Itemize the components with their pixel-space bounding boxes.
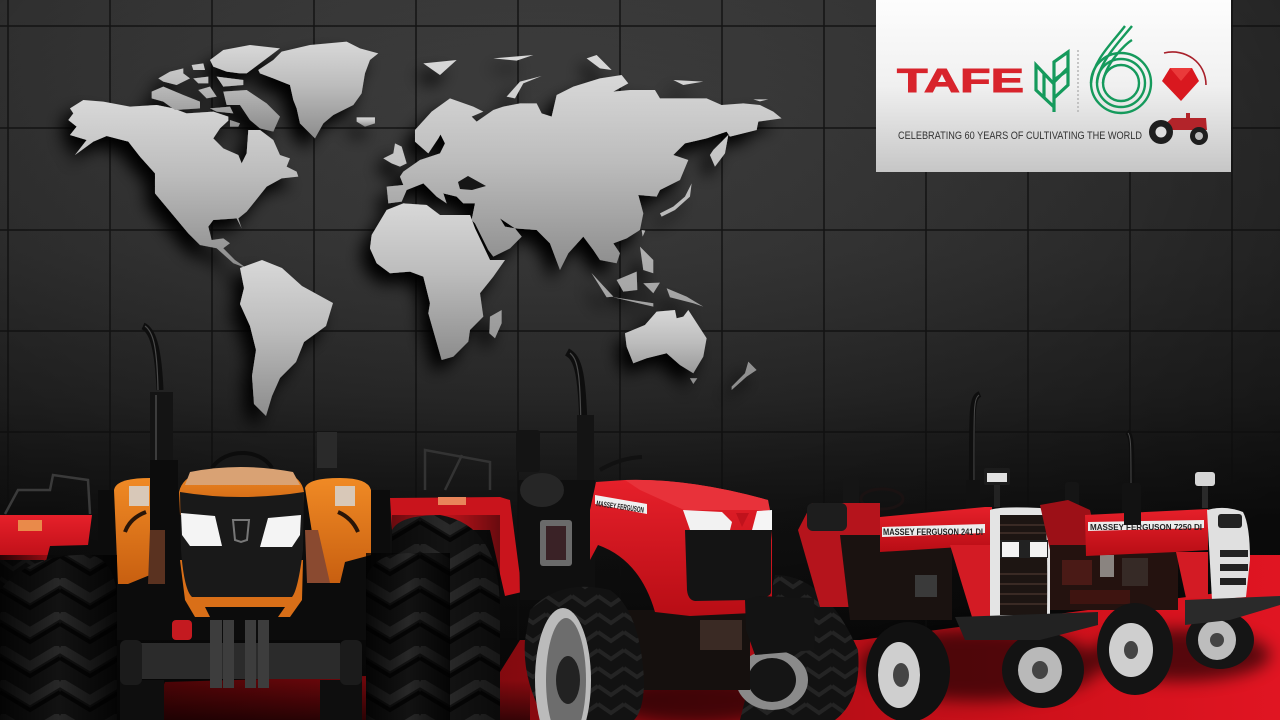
rear red tractor behind orange tractor bbox=[390, 450, 522, 720]
icon: green wheat leaf bbox=[1036, 52, 1068, 112]
headlights bbox=[181, 513, 222, 546]
lamps bbox=[129, 486, 149, 506]
Massey Ferguson centre tractor: MASSEY FERGUSON bbox=[596, 499, 645, 515]
front wheel small bbox=[120, 640, 142, 685]
rear front wheel bbox=[1186, 611, 1254, 669]
MF 241 DI tractor: MASSEY FERGUSON 241 DI bbox=[883, 527, 983, 537]
side panel bbox=[1176, 552, 1208, 598]
counterweights bbox=[210, 620, 269, 688]
front wheel bbox=[1097, 603, 1173, 695]
steering wheel bbox=[861, 489, 903, 509]
rear front wheel bbox=[1002, 632, 1084, 708]
front orange frame bbox=[180, 560, 303, 617]
map: North America bbox=[68, 100, 298, 268]
work lamp bbox=[984, 468, 1010, 507]
exhaust overlay bbox=[1124, 505, 1141, 525]
silver grille bbox=[1207, 508, 1250, 600]
seat and steering bbox=[600, 457, 642, 470]
map: Greenland bbox=[258, 42, 378, 138]
map: South America bbox=[240, 260, 333, 416]
hood bbox=[1085, 509, 1208, 556]
MF 7250 DI tractor: MASSEY FERGUSON 7250 DI bbox=[1090, 522, 1202, 532]
mirror bbox=[516, 430, 540, 472]
red floor bbox=[150, 555, 1280, 720]
seat bbox=[807, 503, 847, 531]
map: Old World bbox=[370, 55, 782, 390]
MF 241 DI tractor bbox=[798, 394, 1098, 720]
front axle bbox=[955, 612, 1098, 640]
roll bar bbox=[5, 475, 90, 514]
logo wordmark: TAFE: TAFE bbox=[897, 62, 1024, 99]
map: Iceland bbox=[357, 117, 375, 127]
icon: anniversary six bbox=[1091, 26, 1151, 113]
left orange panel bbox=[114, 478, 150, 584]
rear body bbox=[1040, 500, 1100, 550]
front tire left bbox=[525, 587, 644, 720]
headlights bbox=[683, 510, 732, 530]
logo panel bbox=[876, 0, 1231, 172]
exhaust stack bbox=[143, 326, 178, 580]
MF 7250 DI tractor bbox=[1040, 432, 1280, 695]
hood bbox=[880, 507, 992, 552]
map: Arctic archipelago bbox=[152, 45, 280, 132]
map: Americas and Greenland bbox=[68, 42, 378, 268]
front wheel bbox=[866, 622, 950, 720]
side panel bbox=[950, 545, 992, 617]
mirror and steering bbox=[1065, 482, 1079, 510]
left rear tire bbox=[0, 555, 117, 720]
branding strip bbox=[1088, 520, 1204, 531]
map: Eurasia bbox=[387, 75, 782, 270]
undercarriage bbox=[620, 610, 750, 690]
map: islands bbox=[383, 55, 768, 390]
hood bbox=[179, 469, 304, 515]
emblem bbox=[736, 513, 749, 527]
handles bbox=[125, 512, 358, 532]
far-left red tractor bbox=[0, 475, 92, 720]
rear red body bbox=[798, 503, 880, 607]
front axle bbox=[140, 643, 340, 679]
black grille bbox=[685, 530, 771, 601]
branding strip bbox=[882, 524, 985, 537]
map: Australia bbox=[625, 310, 707, 384]
mirror bbox=[317, 432, 337, 468]
emblem bbox=[233, 520, 249, 542]
roll bar bbox=[425, 450, 490, 490]
Massey Ferguson centre tractor bbox=[516, 352, 859, 720]
front grille bbox=[180, 492, 304, 597]
icon: ruby bbox=[1162, 52, 1206, 101]
exhaust stack bbox=[567, 352, 594, 525]
steering wheel bbox=[212, 453, 272, 468]
right rear tire bbox=[366, 553, 450, 720]
headlights bbox=[1000, 540, 1048, 558]
front weights bbox=[745, 596, 815, 655]
engine block bbox=[840, 535, 952, 620]
right orange panel bbox=[305, 478, 371, 583]
engine block bbox=[1050, 545, 1178, 610]
work lamp bbox=[1195, 472, 1215, 508]
rear tire right bbox=[736, 575, 859, 720]
orange tractor bbox=[0, 326, 450, 720]
divider bbox=[1077, 50, 1079, 113]
map: Black Sea bbox=[458, 176, 486, 190]
red tow hook bbox=[172, 620, 192, 640]
world map bbox=[68, 42, 782, 416]
icon: small tractor bbox=[1149, 113, 1208, 145]
front axle bbox=[1185, 596, 1280, 625]
map: Africa bbox=[370, 203, 505, 360]
mirror bbox=[843, 477, 859, 511]
body shadow bbox=[98, 490, 390, 640]
branding strip bbox=[595, 495, 647, 514]
hood bbox=[590, 480, 772, 616]
tagline: CELEBRATING 60 YEARS OF CULTIVATING THE WORLD bbox=[898, 130, 1142, 142]
exhaust stack bbox=[1127, 432, 1132, 490]
grille bbox=[990, 507, 1050, 617]
exhaust stack bbox=[972, 394, 980, 505]
